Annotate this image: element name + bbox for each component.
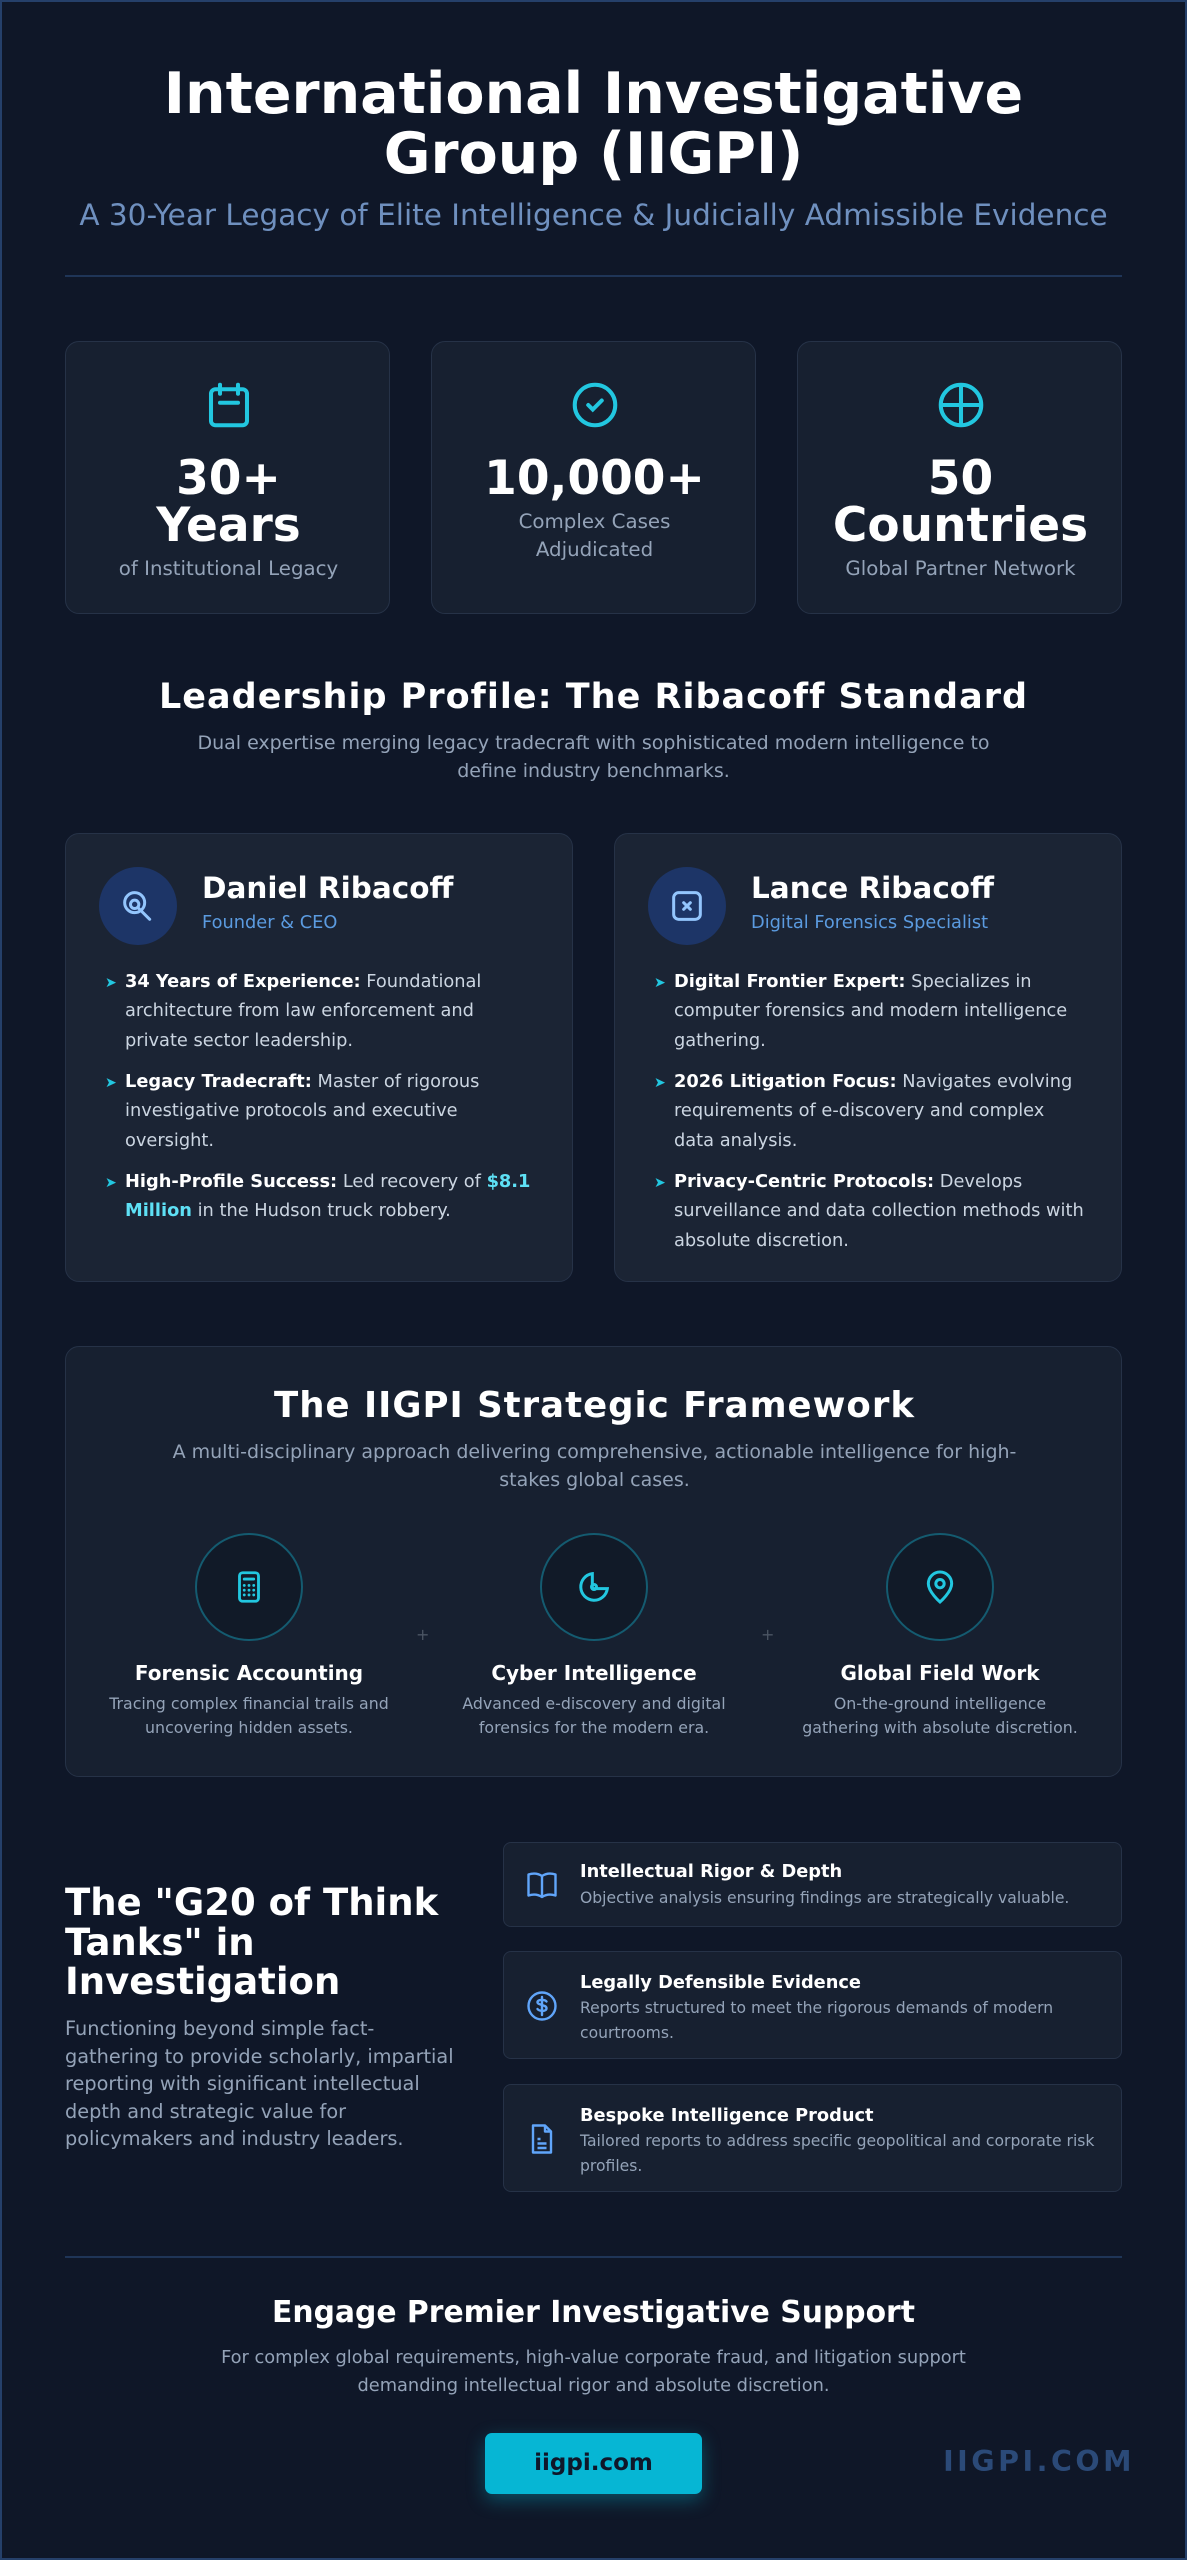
bullet: architecture from law enforcement and bbox=[125, 1000, 474, 1021]
pillar: forensic accounting bbox=[109, 1533, 389, 1737]
stat number bbox=[156, 451, 301, 553]
bullet: gathering. bbox=[674, 1030, 766, 1051]
title: Group (IIGPI) bbox=[384, 121, 803, 187]
bullet: absolute discretion. bbox=[674, 1230, 849, 1251]
icon: moon/pie bbox=[540, 1533, 648, 1641]
bullet: 34 Years of Experience: Foundational bbox=[125, 971, 481, 992]
card: intellectual rigor bbox=[503, 1842, 1122, 1927]
panel: strategic framework bbox=[65, 1346, 1122, 1777]
stat label: Complex Cases bbox=[519, 510, 670, 533]
heading: G20: Investigation bbox=[65, 1960, 340, 2003]
card: legally defensible: courtrooms. bbox=[580, 2024, 674, 2042]
panel: Lance Ribacoff: ➤ bbox=[654, 975, 666, 991]
icon: map pin bbox=[886, 1533, 994, 1641]
stat card: countries bbox=[797, 341, 1122, 614]
stat number: Countries bbox=[833, 498, 1088, 553]
watermark: IIGPI.COM bbox=[943, 2445, 1135, 2478]
card: intellectual rigor: Objective analysis ensuring findings are strategically valuable. bbox=[580, 1889, 1069, 1907]
framework subtitle: stakes global cases. bbox=[499, 1469, 690, 1491]
stat label: Adjudicated bbox=[536, 538, 653, 561]
G20 paragraph: policymakers and industry leaders. bbox=[65, 2127, 404, 2150]
G20 paragraph: Functioning beyond simple fact- bbox=[65, 2017, 374, 2040]
bullet: Million in the Hudson truck robbery. bbox=[125, 1200, 451, 1221]
bullet: investigative protocols and executive bbox=[125, 1100, 458, 1121]
bullet: computer forensics and modern intelligence bbox=[674, 1000, 1067, 1021]
stat number bbox=[833, 451, 1088, 553]
heading: G20 bbox=[65, 1881, 439, 2003]
framework subtitle: A multi-disciplinary approach delivering comprehensive, actionable intelligence for high- bbox=[173, 1441, 1016, 1463]
stat card: years bbox=[65, 341, 390, 614]
stat card: cases bbox=[431, 341, 756, 614]
panel: Lance Ribacoff: ➤ bbox=[654, 1175, 666, 1191]
panel: Daniel Ribacoff: ➤ bbox=[105, 1075, 117, 1091]
bullet: requirements of e-discovery and complex bbox=[674, 1100, 1044, 1121]
button: iigpi.com: iigpi.com bbox=[534, 2450, 653, 2476]
card: bespoke product: Bespoke Intelligence Product bbox=[580, 2105, 874, 2126]
pillar: cyber intelligence: forensics for the modern era. bbox=[479, 1718, 709, 1737]
button: iigpi.com bbox=[485, 2433, 702, 2494]
panel: Lance Ribacoff bbox=[614, 833, 1122, 1282]
stat number: Years bbox=[156, 498, 301, 553]
pillar: cyber intelligence: Advanced e-discovery and digital bbox=[462, 1694, 726, 1713]
bullet bbox=[105, 1171, 530, 1221]
pillar: global field work: Global Field Work bbox=[840, 1661, 1040, 1685]
pillar: global field work: On-the-ground intelligence bbox=[834, 1694, 1046, 1713]
card: intellectual rigor: Intellectual Rigor & Depth bbox=[580, 1861, 842, 1882]
role: Digital Forensics Specialist bbox=[751, 912, 988, 933]
icon: globe bbox=[938, 382, 984, 428]
panel: Daniel Ribacoff: ➤ bbox=[105, 975, 117, 991]
bullet bbox=[105, 1071, 479, 1151]
engage paragraph: For complex global requirements, high-value corporate fraud, and litigation support bbox=[221, 2347, 966, 2368]
title bbox=[164, 61, 1023, 187]
leadership subtitle: define industry benchmarks. bbox=[457, 760, 730, 782]
G20 paragraph bbox=[65, 2017, 454, 2150]
panel: Lance Ribacoff: ➤ bbox=[654, 1075, 666, 1091]
bullet: surveillance and data collection methods with bbox=[674, 1200, 1084, 1221]
leadership subtitle: Dual expertise merging legacy tradecraft with sophisticated modern intelligence to bbox=[197, 732, 990, 754]
subtitle: A 30-Year Legacy of Elite Intelligence & Judicially Admissible Evidence bbox=[79, 198, 1108, 232]
pillar: cyber intelligence bbox=[462, 1533, 726, 1737]
icon: calendar bbox=[208, 382, 249, 428]
heading: G20: Tanks" in bbox=[65, 1920, 255, 1964]
bullet: 2026 Litigation Focus: Navigates evolving bbox=[674, 1071, 1072, 1092]
bullet: private sector leadership. bbox=[125, 1030, 353, 1051]
G20 paragraph: gathering to provide scholarly, impartial bbox=[65, 2045, 454, 2068]
name: Daniel Ribacoff bbox=[202, 871, 453, 905]
bullet bbox=[105, 971, 481, 1051]
heading: G20: The "G20 of Think bbox=[65, 1881, 438, 1924]
framework heading: The IIGPI Strategic Framework bbox=[274, 1385, 915, 1426]
card: legally defensible: Legally Defensible Evidence bbox=[580, 1972, 861, 1993]
stat label: Global Partner Network bbox=[845, 557, 1076, 580]
pillar: forensic accounting: uncovering hidden assets. bbox=[145, 1718, 353, 1737]
pillar: forensic accounting: Tracing complex financial trails and bbox=[109, 1694, 389, 1713]
stat label bbox=[519, 510, 670, 561]
bullet bbox=[654, 971, 1067, 1051]
bullet bbox=[654, 1171, 1084, 1251]
avatar icon bbox=[648, 867, 726, 945]
pillar: global field work bbox=[802, 1533, 1078, 1737]
icon: book bbox=[527, 1872, 557, 1898]
engage paragraph bbox=[221, 2347, 966, 2396]
leadership subtitle bbox=[197, 732, 990, 782]
panel: Daniel Ribacoff: ➤ bbox=[105, 1175, 117, 1191]
bullet: data analysis. bbox=[674, 1130, 797, 1151]
avatar icon bbox=[99, 867, 177, 945]
bullet: High-Profile Success: Led recovery of $8.1 bbox=[125, 1171, 530, 1192]
role: Founder & CEO bbox=[202, 912, 337, 933]
engage paragraph: demanding intellectual rigor and absolute discretion. bbox=[357, 2375, 830, 2396]
pillar: global field work: gathering with absolute discretion. bbox=[802, 1718, 1078, 1737]
pillar: cyber intelligence: Cyber Intelligence bbox=[491, 1661, 697, 1685]
plus: + bbox=[416, 1625, 429, 1644]
plus: + bbox=[761, 1625, 774, 1644]
card: legally defensible bbox=[503, 1951, 1122, 2059]
pillar: forensic accounting: Forensic Accounting bbox=[135, 1661, 363, 1685]
framework subtitle bbox=[172, 1441, 1016, 1491]
card: bespoke product: Tailored reports to address specific geopolitical and corporate risk bbox=[580, 2132, 1094, 2150]
name: Lance Ribacoff bbox=[751, 871, 994, 905]
title: International Investigative bbox=[164, 61, 1023, 127]
stat number: 30+ bbox=[176, 451, 281, 506]
bullet: Legacy Tradecraft: Master of rigorous bbox=[125, 1071, 479, 1092]
icon: check circle bbox=[572, 382, 618, 428]
icon: calculator bbox=[195, 1533, 303, 1641]
icon: document bbox=[532, 2124, 552, 2154]
G20 paragraph: reporting with significant intellectual bbox=[65, 2072, 420, 2095]
G20 paragraph: depth and strategic value for bbox=[65, 2100, 346, 2123]
icon: dollar circle bbox=[527, 1991, 557, 2021]
card: bespoke product bbox=[503, 2084, 1122, 2192]
card: bespoke product: profiles. bbox=[580, 2157, 642, 2175]
panel: Daniel Ribacoff bbox=[65, 833, 573, 1282]
heading: engage: Engage Premier Investigative Support bbox=[272, 2295, 915, 2330]
bullet: Privacy-Centric Protocols: Develops bbox=[674, 1171, 1022, 1192]
stat number: 50 bbox=[928, 451, 993, 506]
bullet bbox=[654, 1071, 1072, 1151]
heading: leadership: Leadership Profile: The Ribacoff Standard bbox=[159, 677, 1028, 717]
stat number: 10,000+ bbox=[484, 451, 705, 506]
bullet: Digital Frontier Expert: Specializes in bbox=[674, 971, 1032, 992]
bullet: oversight. bbox=[125, 1130, 214, 1151]
stat label: of Institutional Legacy bbox=[119, 557, 338, 580]
card: legally defensible: Reports structured to meet the rigorous demands of modern bbox=[580, 1999, 1053, 2017]
